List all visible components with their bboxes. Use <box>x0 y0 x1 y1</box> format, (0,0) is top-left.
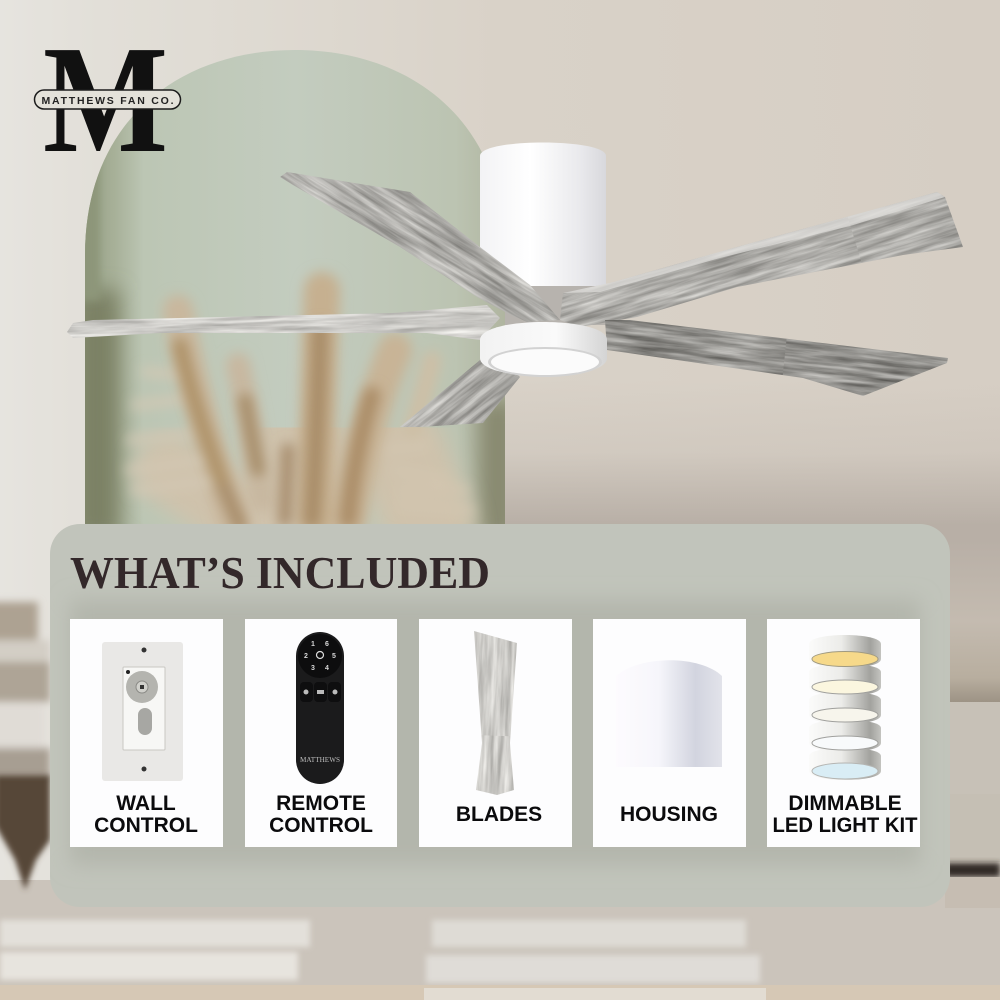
icon: wall control <box>102 642 183 781</box>
panel: what's included <box>50 524 950 907</box>
icon: light discs <box>809 635 881 780</box>
label: CONTROL <box>94 814 198 837</box>
fan housing <box>480 142 606 295</box>
card: blades <box>419 619 572 847</box>
heading: WHAT’S INCLUDED <box>70 547 490 598</box>
label: REMOTE <box>276 792 366 815</box>
label: HOUSING <box>620 803 718 826</box>
blade: upper right <box>560 192 963 327</box>
card: LED light kit <box>767 619 920 847</box>
arch niche <box>75 50 518 540</box>
sofa left and plant <box>0 602 50 890</box>
icon: remote <box>296 632 344 784</box>
pampas grass <box>130 290 470 525</box>
LED light kit on fan <box>480 322 607 377</box>
icon: housing <box>616 660 722 767</box>
fan hub <box>505 286 606 325</box>
blade: left <box>67 305 500 340</box>
card: wall control <box>70 619 223 847</box>
label: DIMMABLE <box>788 792 902 815</box>
logo: MATTHEWS FAN CO. <box>42 95 174 107</box>
label: WALL <box>116 792 176 815</box>
blade: upper left <box>280 172 560 322</box>
blade: lower right <box>605 320 948 396</box>
icon: remote: 4 <box>325 665 329 672</box>
sofa right <box>945 540 1000 908</box>
label: BLADES <box>456 803 542 826</box>
floor <box>0 880 1000 1000</box>
label: CONTROL <box>269 814 373 837</box>
ceiling fan <box>67 142 963 427</box>
icon: remote: MATTHEWS <box>300 755 340 764</box>
icon: remote: 6 <box>325 641 329 648</box>
icon: remote: 1 <box>311 641 315 648</box>
card: housing <box>593 619 746 847</box>
label: LED LIGHT KIT <box>772 814 918 837</box>
logo: M <box>43 15 168 185</box>
icon: remote: 5 <box>332 653 336 660</box>
blade: bottom <box>400 352 520 427</box>
icon: remote: 2 <box>304 653 308 660</box>
card: remote control <box>245 619 397 847</box>
icon: remote: 3 <box>311 665 315 672</box>
icon: blade <box>474 631 517 795</box>
